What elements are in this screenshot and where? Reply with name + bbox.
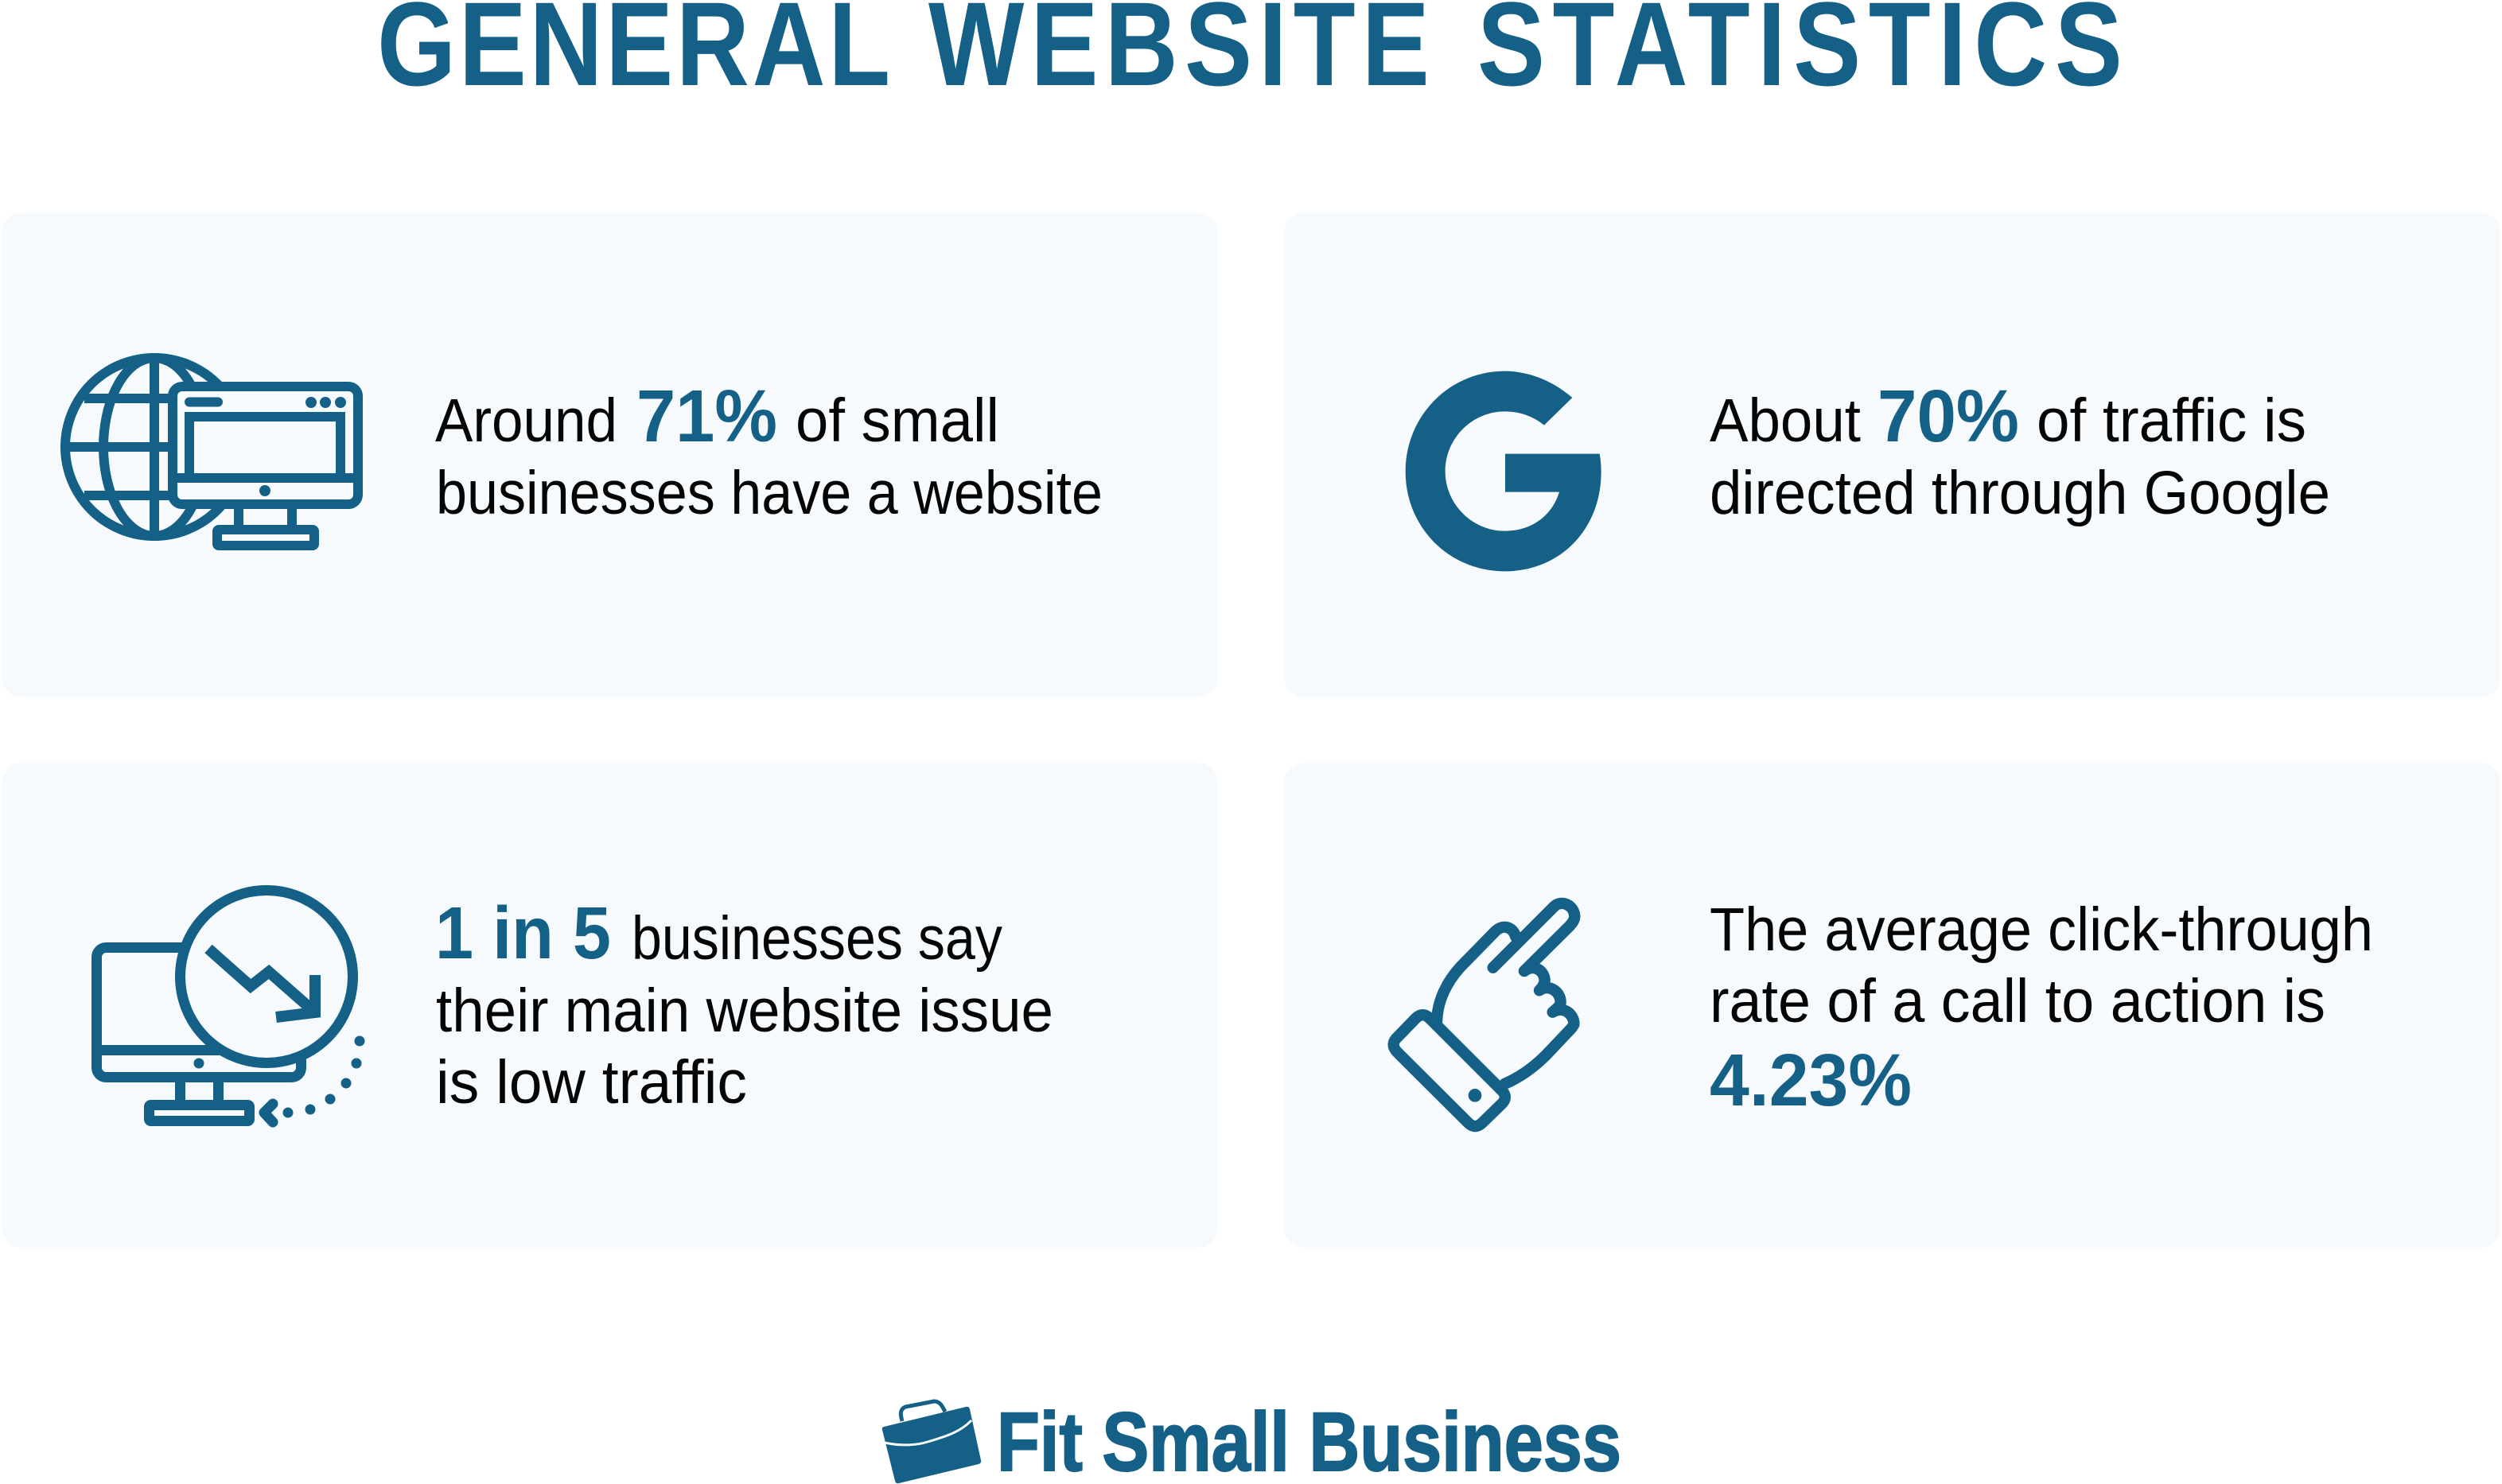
text: 1 in 5 statistic	[435, 892, 1053, 1117]
text: 71% statistic: of small	[796, 387, 999, 455]
panel: 1 in 5 businesses low traffic	[2, 763, 1218, 1248]
title	[377, 0, 2123, 111]
text: 70% statistic: 70%	[1877, 375, 2019, 457]
text: 1 in 5 statistic: is low traffic	[436, 1048, 747, 1117]
text: 4.23% statistic: The average click-through	[1710, 895, 2373, 964]
icon: globe and monitor	[65, 356, 358, 546]
panel: 71% of small businesses have a website	[2, 212, 1218, 697]
text: 71% statistic: businesses have a website	[436, 459, 1103, 527]
text: 70% statistic: About	[1710, 387, 1861, 455]
icon: monitor with falling trend	[96, 891, 364, 1122]
panel: 4.23% click-through rate	[1284, 763, 2500, 1248]
icon: briefcase	[882, 1401, 981, 1483]
icon: pointing hand	[1394, 903, 1574, 1126]
icon: Google G	[1406, 371, 1601, 571]
logo: Fit Small Business	[882, 1396, 1621, 1484]
text: 71% statistic: Around	[435, 387, 617, 455]
text: 70% statistic: directed through Google	[1710, 459, 2330, 527]
panel: 70% of traffic through Google	[1284, 212, 2500, 697]
text: 1 in 5 statistic: businesses say	[632, 904, 1002, 973]
text: 4.23% statistic: rate of a call to action is	[1710, 967, 2325, 1035]
text: 1 in 5 statistic: their main website issue	[436, 977, 1053, 1045]
text: 70% statistic	[1710, 375, 2330, 527]
text: 71% statistic	[435, 375, 1103, 527]
text: 4.23% statistic: 4.23%	[1710, 1039, 1912, 1121]
text: 1 in 5 statistic: 1 in 5	[435, 892, 611, 974]
text: 70% statistic: of traffic is	[2037, 387, 2306, 455]
text: 4.23% statistic	[1710, 895, 2373, 1121]
text: 71% statistic: 71%	[636, 375, 777, 457]
